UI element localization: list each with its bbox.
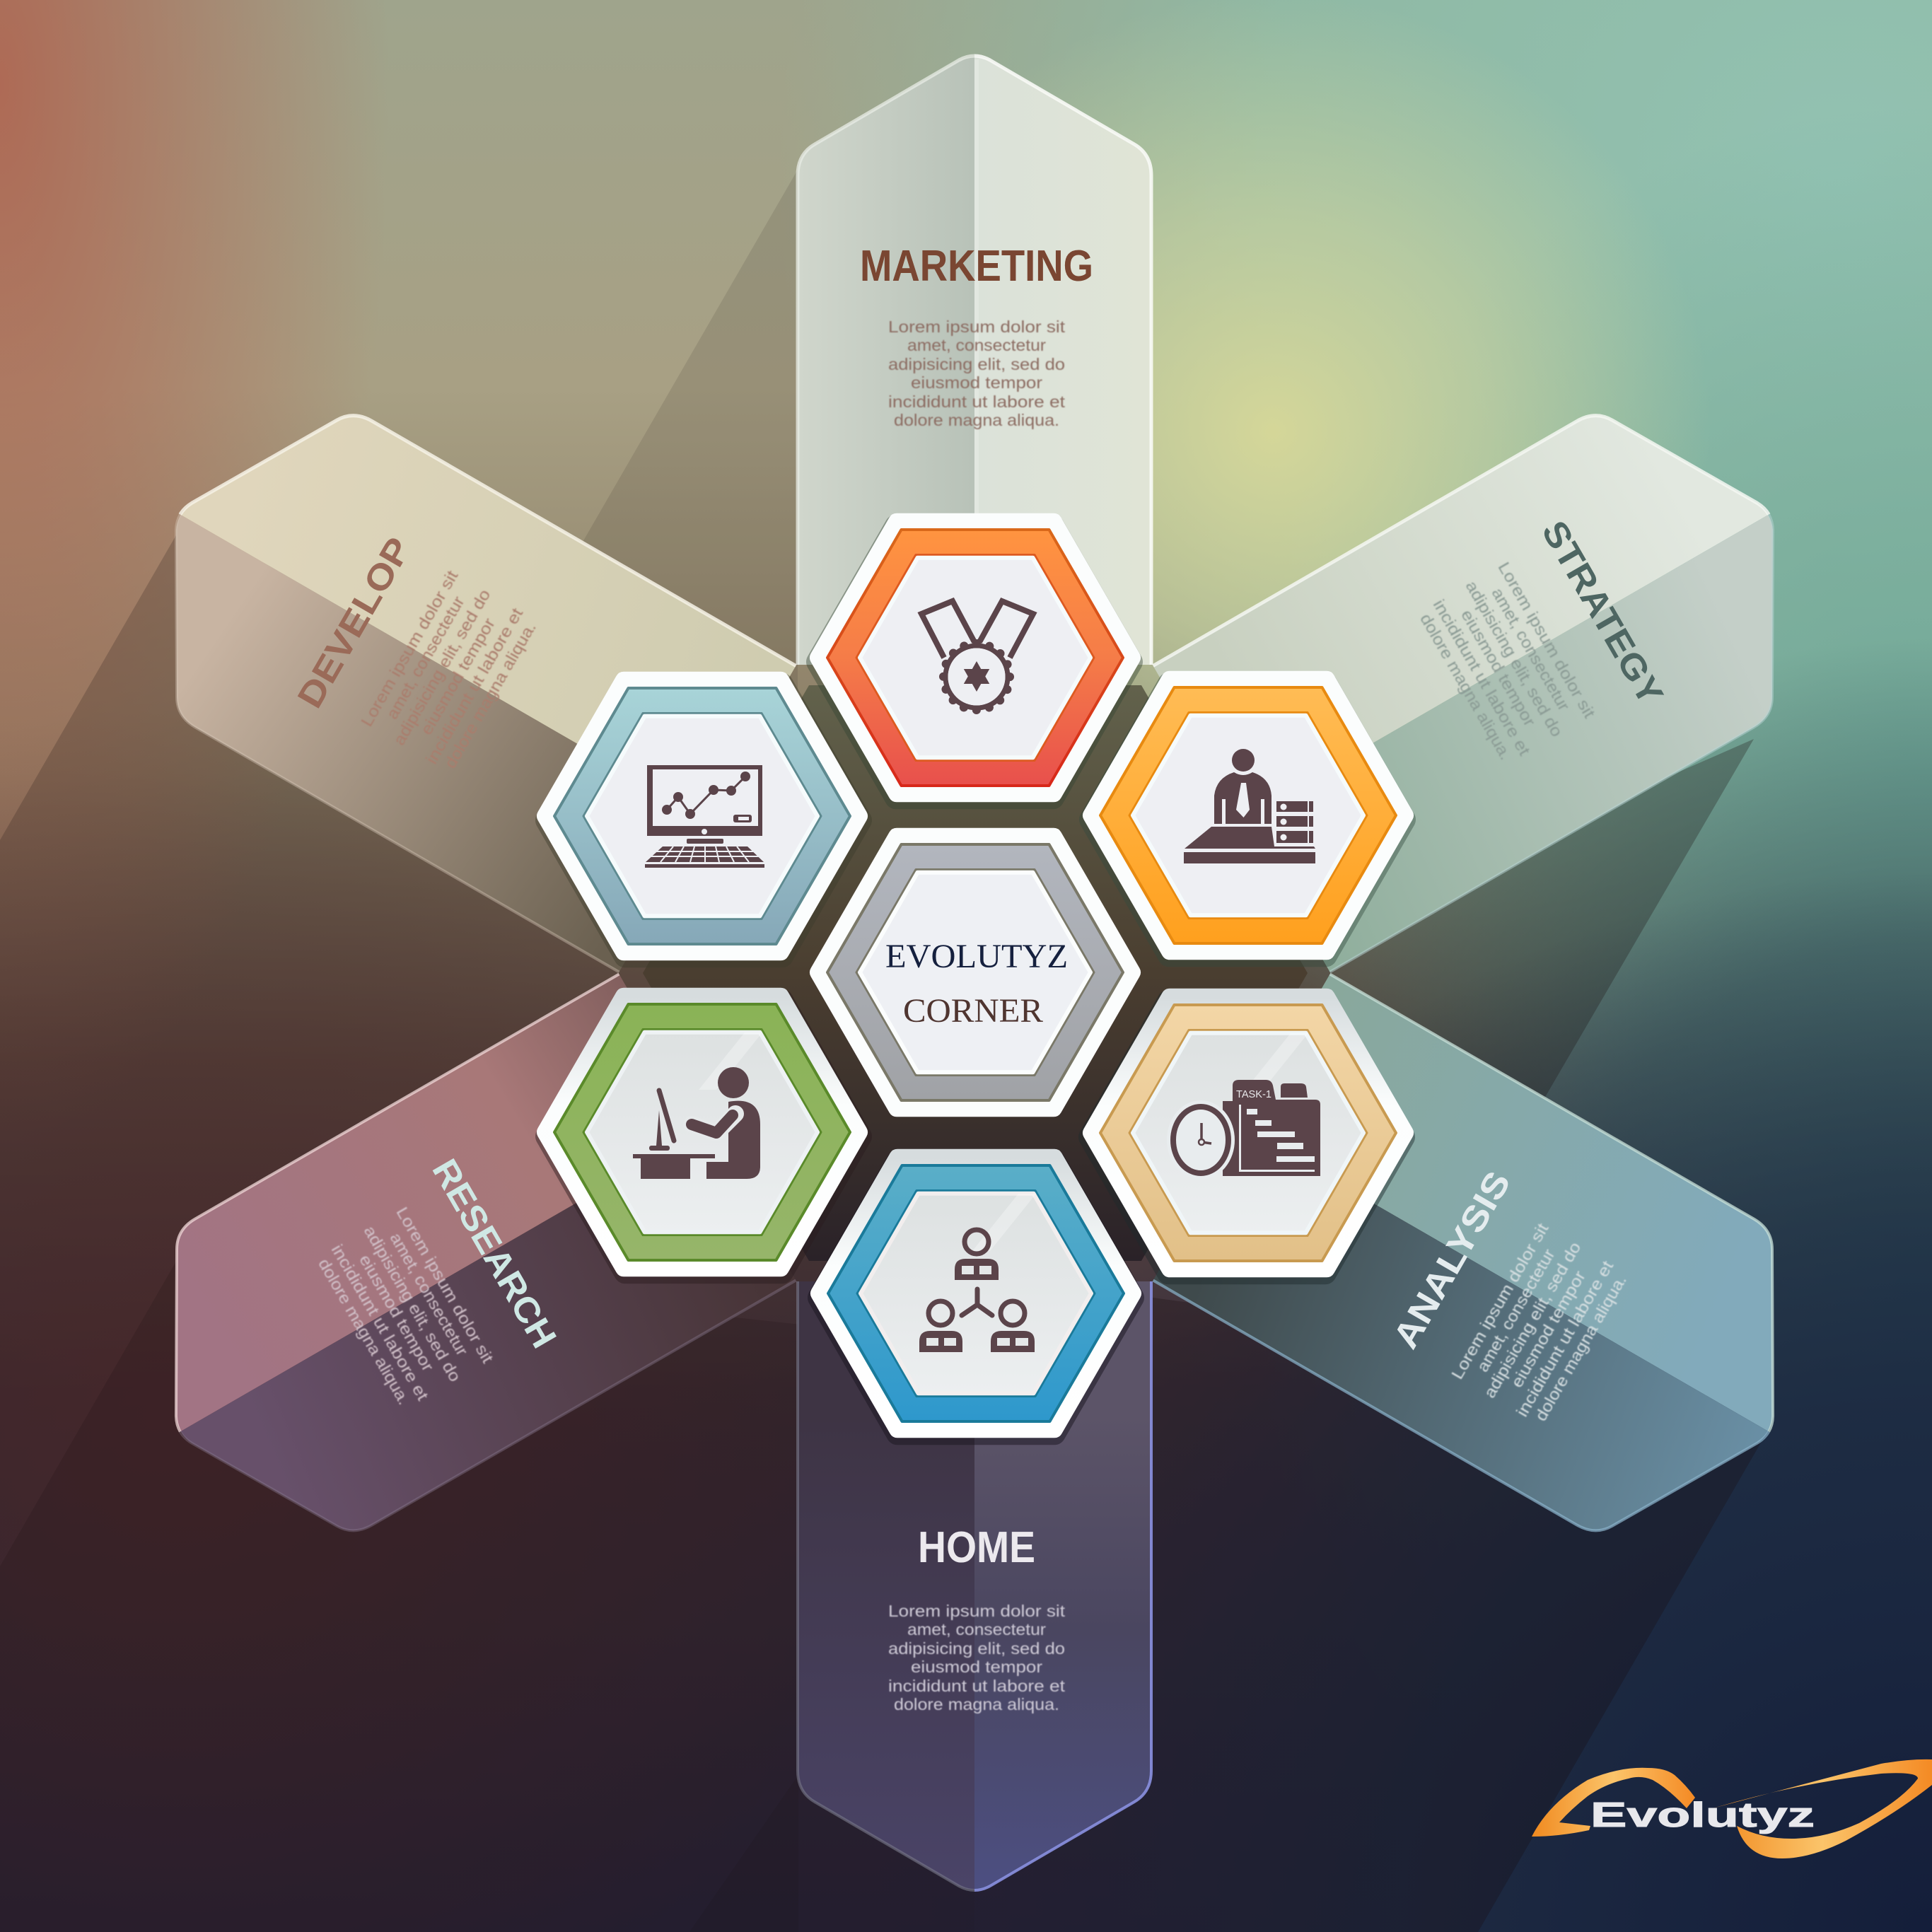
- text block: analysis: amet, consectetur: [1473, 1245, 1559, 1375]
- text block: home: [888, 1602, 1066, 1713]
- text block: marketing: Lorem ipsum dolor sit: [888, 318, 1066, 336]
- text block: home: amet, consectetur: [907, 1620, 1046, 1639]
- panel: develop arm: [92, 361, 796, 972]
- text block: develop: Lorem ipsum dolor sit: [357, 567, 462, 730]
- panel: marketing arm: [798, 56, 1151, 665]
- text block: develop: dolore magna aliqua.: [441, 619, 540, 772]
- icon: medal: [921, 601, 1033, 710]
- text block: analysis: eiusmod tempor: [1507, 1267, 1589, 1391]
- hexagon: analysis: [1090, 997, 1405, 1273]
- icon: person at computer: [633, 1067, 760, 1179]
- logo: Evolutyz: [1532, 1759, 1932, 1858]
- hexagon: research: [545, 996, 861, 1272]
- text block: develop: incididunt ut labore et: [422, 605, 527, 767]
- text block: marketing: adipisicing elit, sed do: [888, 355, 1065, 373]
- heading: analysis: ANALYSIS: [1385, 1165, 1518, 1355]
- text block: strategy: adipisicing elit, sed do: [1462, 578, 1566, 740]
- panel: analysis arm: [1153, 974, 1857, 1585]
- text block: strategy: amet, consectetur: [1488, 585, 1573, 714]
- text block: develop: eiusmod tempor: [417, 615, 499, 738]
- hexagon: marketing: [817, 522, 1132, 798]
- text block: marketing: dolore magna aliqua.: [894, 411, 1059, 429]
- heading: develop: DEVELOP: [290, 530, 419, 715]
- text block: strategy: [1414, 559, 1599, 768]
- logo: Evolutyz: Evolutyz: [1590, 1796, 1815, 1834]
- icon: monitor with line chart: [645, 765, 764, 868]
- hexagon: center: [818, 837, 1132, 1108]
- panel: research arm: [92, 974, 796, 1585]
- text block: research: [312, 1204, 497, 1413]
- heading: strategy: STRATEGY: [1534, 514, 1671, 711]
- text block: home: adipisicing elit, sed do: [888, 1639, 1065, 1658]
- text block: develop: adipisicing elit, sed do: [390, 586, 494, 748]
- text block: home: eiusmod tempor: [911, 1658, 1042, 1676]
- text block: analysis: incididunt ut labore et: [1513, 1257, 1617, 1420]
- icon: clock and task folder: TASK-1: [1236, 1088, 1271, 1100]
- icon: three connected people: [919, 1230, 1035, 1352]
- text block: research: eiusmod tempor: [356, 1251, 438, 1375]
- hexagon: home: [819, 1158, 1133, 1433]
- text block: marketing: eiusmod tempor: [911, 373, 1042, 392]
- panel: strategy arm: [1153, 361, 1857, 972]
- heading: home: HOME: [918, 1523, 1035, 1572]
- text block: develop: amet, consectetur: [383, 593, 468, 722]
- text block: research: incididunt ut labore et: [328, 1241, 432, 1404]
- text block: home: Lorem ipsum dolor sit: [888, 1602, 1066, 1620]
- text block: develop: [357, 567, 542, 776]
- text block: marketing: [888, 318, 1066, 429]
- hexagon: develop: [545, 680, 861, 956]
- text block: home: dolore magna aliqua.: [894, 1695, 1059, 1713]
- title: Evolutyz Corner: EVOLUTYZ: [885, 938, 1068, 975]
- text block: strategy: Lorem ipsum dolor sit: [1494, 559, 1599, 721]
- text block: marketing: incididunt ut labore et: [888, 392, 1066, 411]
- text block: analysis: [1448, 1220, 1633, 1429]
- text block: strategy: eiusmod tempor: [1457, 606, 1540, 730]
- text block: research: amet, consectetur: [386, 1230, 472, 1359]
- title: Evolutyz Corner: [885, 938, 1068, 1030]
- text block: strategy: incididunt ut labore et: [1430, 596, 1534, 759]
- text block: strategy: dolore magna aliqua.: [1416, 610, 1515, 763]
- icon: clock and task folder: [1170, 1080, 1320, 1177]
- text block: marketing: amet, consectetur: [907, 336, 1046, 354]
- title: Evolutyz Corner: CORNER: [903, 992, 1043, 1030]
- text block: home: incididunt ut labore et: [888, 1677, 1066, 1695]
- text block: analysis: adipisicing elit, sed do: [1480, 1239, 1584, 1401]
- hub: dark gaps between hexagons: [643, 685, 1308, 1261]
- hexagon: strategy: [1090, 680, 1405, 955]
- text block: research: Lorem ipsum dolor sit: [392, 1204, 497, 1366]
- panel: home arm: [798, 1281, 1151, 1890]
- text block: analysis: dolore magna aliqua.: [1531, 1271, 1630, 1424]
- icon: manager at desk: [1184, 749, 1315, 863]
- heading: research: RESEARCH: [424, 1152, 564, 1355]
- text block: research: adipisicing elit, sed do: [361, 1223, 465, 1385]
- heading: marketing: MARKETING: [860, 242, 1093, 291]
- text block: research: dolore magna aliqua.: [315, 1255, 414, 1408]
- text block: analysis: Lorem ipsum dolor sit: [1448, 1220, 1552, 1383]
